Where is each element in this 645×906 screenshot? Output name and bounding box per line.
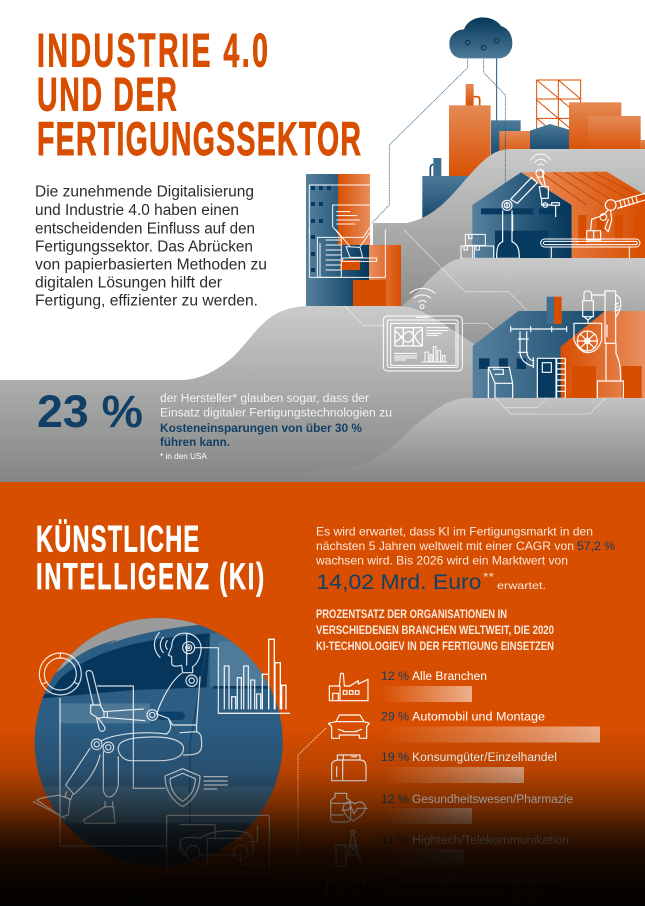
icon: car [328, 715, 369, 738]
row: Gesundheitswesen/Pharmazie: 12 % [381, 794, 409, 806]
market text: 14,02 Mrd. Euro [316, 571, 482, 594]
chart heading: PROZENTSATZ DER ORGANISATIONEN IN [316, 607, 507, 621]
chart heading: KI-TECHNOLOGIEV IN DER FERTIGUNG EINSETZEN [316, 639, 554, 653]
robot arm left [497, 169, 559, 258]
wifi icon [410, 288, 435, 309]
conveyor [541, 239, 640, 258]
page background [0, 0, 645, 482]
heading: KI: INTELLIGENZ (KI) [36, 555, 264, 597]
row: Geschäftliche Dienstleistungen: Geschäftliche, rechtliche und [405, 876, 560, 888]
dummy torso and arm [86, 671, 200, 734]
market text: ** [483, 570, 494, 584]
hill: front left [0, 306, 480, 482]
intro text: digitalen Lösungen hilft der [35, 275, 222, 292]
building windows [311, 186, 331, 272]
scaffold [537, 80, 581, 157]
stat description: Kosteneinsparungen von über 30 % [160, 423, 362, 435]
icon: cloud [449, 17, 512, 58]
row: Automobil und Montage: 29 % [381, 712, 409, 724]
row: Alle Branchen [381, 671, 487, 702]
chart heading [316, 607, 554, 653]
illustration: smart factory [0, 17, 645, 482]
boxes [461, 234, 494, 258]
market text [315, 526, 615, 594]
market text: wachsen wird. Bis 2026 wird ein Marktwert von [315, 554, 568, 568]
bar chart: branches [380, 671, 600, 902]
intro text: Die zunehmende Digitalisierung [35, 184, 254, 201]
hill: upper [373, 149, 645, 360]
icon: tower and phone [336, 830, 361, 866]
connector lines [60, 648, 218, 846]
circuit line through hall [504, 140, 507, 197]
market text: Es wird erwartet, dass KI im Fertigungsmarkt in den [316, 526, 593, 539]
intro text: Fertigungssektor. Das Abrücken [35, 239, 253, 256]
tablet [383, 288, 462, 371]
market text: 57,2 % [577, 540, 615, 553]
circuit lines [372, 41, 505, 223]
row: Hightech/Telekommunikation [381, 835, 569, 865]
circuit lines lower [345, 230, 527, 367]
sector icons [327, 673, 369, 901]
stat description: der Hersteller* glauben sogar, dass der [160, 393, 369, 405]
market text: erwartet. [497, 580, 546, 592]
icon: factory [329, 673, 368, 701]
intro text: entscheidenden Einfluss auf den [35, 220, 255, 237]
left building [306, 174, 401, 306]
hill: front right [300, 398, 645, 482]
car in frame [167, 815, 269, 873]
stat description [160, 393, 392, 461]
title [37, 25, 361, 166]
stat description: Einsatz digitaler Fertigungstechnologien zu [160, 408, 392, 420]
circle background [33, 610, 287, 870]
panel: künstliche intelligenz [0, 482, 645, 906]
icon: medicine and heart [331, 793, 367, 822]
shield [165, 769, 227, 807]
small blue building [422, 158, 469, 219]
intro text [35, 184, 267, 310]
dummy legs [33, 732, 202, 823]
footer text: Im Jahr 2020 nutzen nur 12 % der [35, 893, 219, 905]
lower circuit lines [495, 398, 605, 414]
title: INDUSTRIE 4.0 [37, 25, 268, 77]
line art: bar chart [218, 639, 290, 713]
dummy head [154, 633, 201, 673]
row: Hightech/Telekommunikation: 11 % [381, 835, 409, 847]
title: FERTIGUNGSSEKTOR [37, 114, 361, 166]
chart heading: VERSCHIEDENEN BRANCHEN WELTWEIT, DIE 2020 [316, 623, 554, 637]
hill: middle [403, 258, 645, 400]
row: Automobil und Montage [381, 712, 600, 742]
robot arm right [587, 193, 645, 240]
stat: 23 percent [37, 386, 392, 461]
blue and orange blocks [491, 102, 645, 158]
factory: lower hall [473, 291, 645, 398]
row: Geschäftliche Dienstleistungen [380, 876, 560, 902]
row: Geschäftliche Dienstleistungen: 9 % [381, 876, 401, 888]
row: Gesundheitswesen/Pharmazie [381, 794, 573, 824]
row: Konsumgüter/Einzelhandel [381, 752, 557, 783]
row: Alle Branchen: 12 % [381, 671, 409, 683]
intro text: von papierbasierten Methoden zu [35, 256, 267, 274]
row: Gesundheitswesen/Pharmazie: Gesundheitswesen/Pharmazie [412, 794, 573, 806]
factory: robot hall [461, 140, 645, 260]
icon: handshake [327, 882, 364, 901]
server and laptop line art [309, 185, 373, 237]
intro text: Fertigung, effizienter zu werden. [35, 293, 258, 310]
row: Konsumgüter/Einzelhandel: Konsumgüter/Einzelhandel [412, 752, 557, 764]
row: Hightech/Telekommunikation: Hightech/Telekommunikation [412, 835, 569, 847]
connector: car to automobile [298, 728, 326, 906]
row: Alle Branchen: Alle Branchen [412, 671, 487, 683]
intro text: und Industrie 4.0 haben einen [35, 202, 239, 219]
background buildings and cloud [372, 17, 645, 223]
icon: toaster [332, 755, 366, 781]
steering wheel [39, 653, 81, 695]
stat description: * in den USA [160, 452, 208, 461]
orange tower [449, 84, 491, 180]
row: Geschäftliche Dienstleistungen: professionelle Dienstleistungen [380, 890, 548, 902]
row: Automobil und Montage: Automobil und Montage [412, 712, 545, 724]
bottom fade overlay [0, 725, 645, 906]
heading: KI: KÜNSTLICHE [36, 518, 199, 560]
illustration: crash test dummy [33, 610, 290, 873]
wifi icon [531, 154, 551, 165]
row: Konsumgüter/Einzelhandel: 19 % [381, 752, 409, 764]
stat: 23 percent: 23 % [37, 386, 143, 437]
title: UND DER [37, 69, 177, 121]
stat description: führen kann. [160, 437, 230, 449]
market text: nächsten 5 Jahren weltweit mit einer CAGR von [316, 540, 574, 553]
line art: dummy [33, 633, 269, 873]
heading: KI [36, 518, 264, 597]
